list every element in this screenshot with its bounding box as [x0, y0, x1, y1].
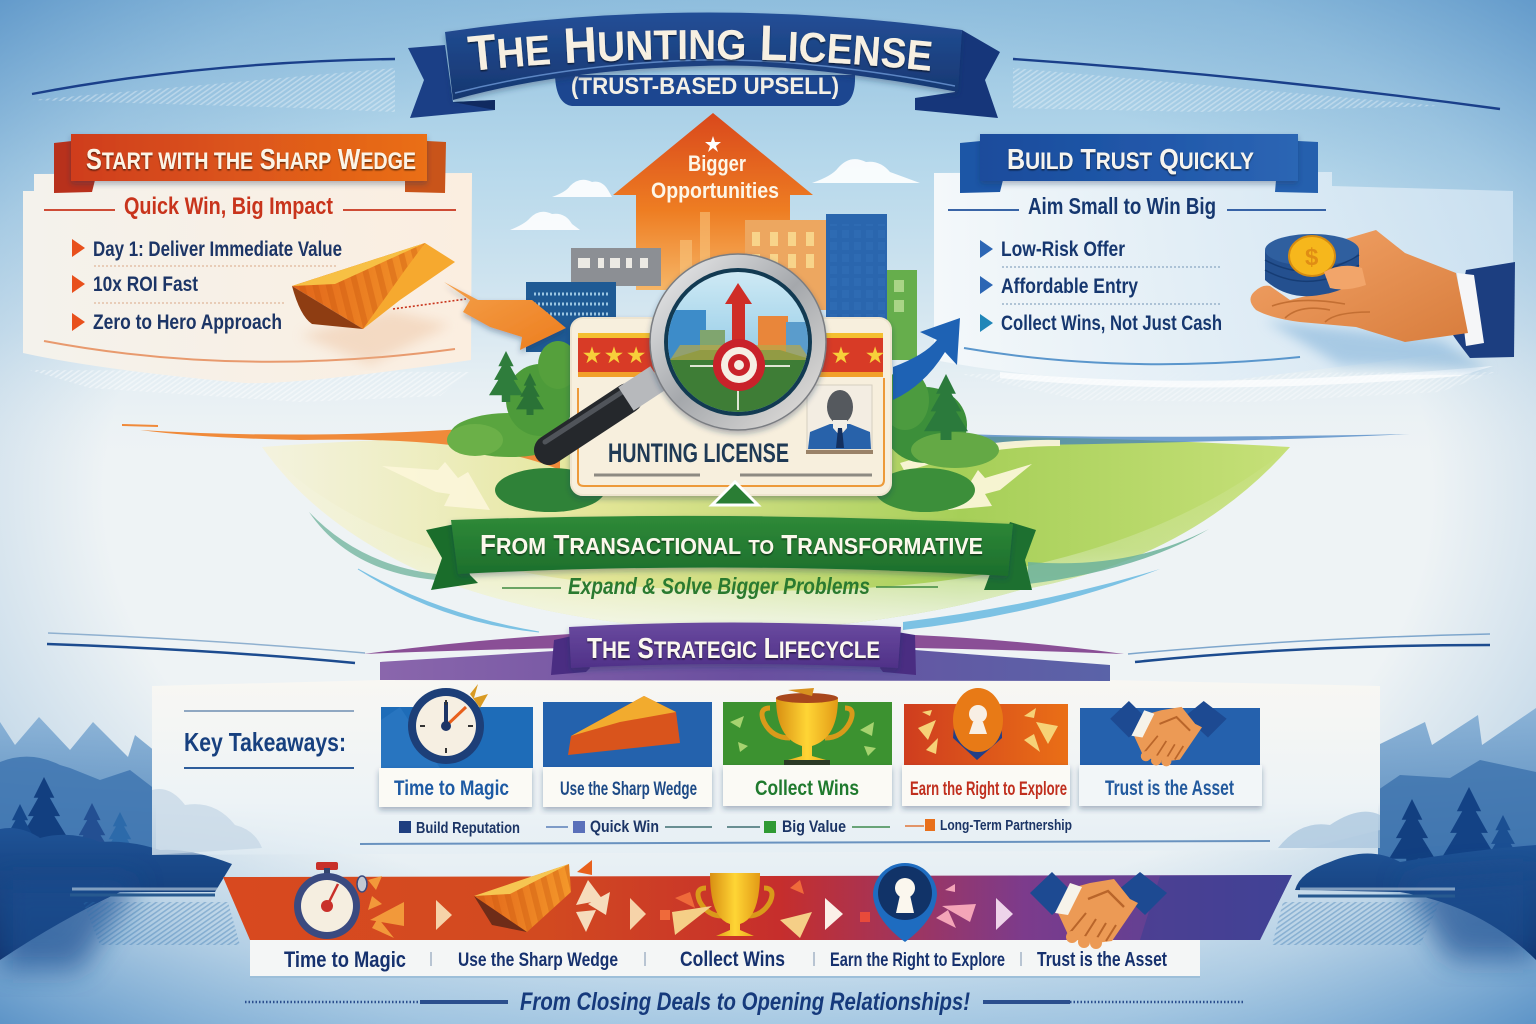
- coin stack: [1265, 250, 1359, 296]
- bullet list: Zero to Hero Approach: [93, 311, 282, 334]
- bullet list: Collect Wins, Not Just Cash: [1001, 312, 1222, 335]
- banner: the strategic lifecycle: [551, 622, 916, 675]
- bullet list: Low-Risk Offer: [1001, 238, 1125, 261]
- icon: hand holding coin: $: [1305, 244, 1319, 271]
- card: trust is the asset: [1079, 701, 1262, 806]
- subtitle plate: (TRUST-BASED UPSELL): [571, 73, 839, 100]
- lifecycle band: [223, 860, 1292, 977]
- tagline: From Closing Deals to Opening Relationships!: [520, 988, 970, 1016]
- icon: wedge: [292, 243, 466, 365]
- license card: ★★: [832, 345, 884, 367]
- banner: from transactional to transformative: [426, 516, 1036, 599]
- trees and hills: [447, 341, 999, 512]
- icon: keyhole pin: [860, 863, 976, 942]
- label strip: Use the Sharp Wedge: [458, 950, 618, 971]
- center: license illustration: [444, 113, 999, 512]
- license card: [571, 318, 891, 495]
- legend row: Big Value: [782, 817, 846, 836]
- buildings: [526, 214, 917, 360]
- label strip: [250, 940, 1200, 977]
- card: collect wins: Collect Wins: [755, 777, 859, 800]
- card: trust is the asset: Trust is the Asset: [1105, 777, 1234, 800]
- label strip: Trust is the Asset: [1037, 949, 1167, 971]
- card: earn the right to explore: [902, 688, 1070, 806]
- bullet list: 10x ROI Fast: [93, 273, 198, 296]
- icon: trophy: [660, 873, 812, 938]
- card: use the sharp wedge: Use the Sharp Wedge: [560, 779, 697, 800]
- icon: broken wedge: [474, 860, 610, 932]
- green field: [262, 436, 1290, 632]
- peak marker: [712, 482, 758, 505]
- card: time to magic: [379, 684, 533, 807]
- portrait: [807, 385, 872, 449]
- bullet list: [72, 238, 342, 334]
- title ribbon: [408, 12, 1000, 118]
- bullet list: Day 1: Deliver Immediate Value: [93, 238, 342, 261]
- arrow: bigger opportunities: Bigger: [688, 151, 746, 176]
- banner: BUILD TRUST QUICKLY: [1007, 144, 1254, 176]
- license title: HUNTING LICENSE: [608, 438, 789, 468]
- heading: Aim Small to Win Big: [1028, 193, 1216, 219]
- top decorative streaks: [32, 59, 1500, 112]
- banner: START WITH THE SHARP WEDGE: [86, 144, 416, 176]
- blue swoosh right: [930, 433, 1410, 446]
- panel: key takeaways: [152, 650, 1380, 855]
- card: collect wins: [723, 688, 892, 806]
- bullet list: Affordable Entry: [1001, 275, 1138, 298]
- legend row: Quick Win: [590, 817, 659, 836]
- subtitle: Expand & Solve Bigger Problems: [568, 573, 870, 599]
- card body: [934, 172, 1513, 402]
- forest left: [0, 717, 240, 970]
- label strip: Time to Magic: [284, 947, 406, 972]
- panel: build trust quickly: [934, 134, 1515, 402]
- icon: stopwatch: [294, 862, 404, 939]
- icon: handshake: [1030, 872, 1167, 949]
- card: earn the right to explore: Earn the Right to Explore: [910, 779, 1067, 800]
- heading: key takeaways: Key Takeaways:: [184, 727, 346, 757]
- icon: hand holding coin: [1250, 230, 1515, 370]
- sleeve: [1453, 262, 1515, 358]
- banner: the strategic lifecycle: THE STRATEGIC LIFECYCLE: [587, 633, 880, 665]
- swooshes around lifecycle heading: [47, 633, 1490, 663]
- forest right: [1272, 708, 1536, 960]
- label strip: Earn the Right to Explore: [830, 950, 1005, 971]
- card: time to magic: Time to Magic: [394, 777, 509, 800]
- white flow arrows: [382, 440, 1060, 510]
- card: use the sharp wedge: [543, 696, 712, 807]
- heading: Quick Win, Big Impact: [124, 193, 333, 220]
- arrow: bigger opportunities: [613, 113, 813, 290]
- license card: ★★★: [583, 345, 645, 367]
- banner: [960, 134, 1318, 193]
- bullet list: [980, 238, 1222, 335]
- clouds: [510, 159, 920, 230]
- legend row: Long-Term Partnership: [940, 817, 1072, 834]
- magnifier: [545, 254, 826, 450]
- card body: [23, 173, 472, 402]
- label strip: Collect Wins: [680, 948, 785, 971]
- arrow: bigger opportunities: Opportunities: [651, 178, 779, 203]
- banner: [54, 134, 446, 193]
- icon: trophy: [730, 688, 876, 765]
- banner: from transactional to transformative: FROM TRANSACTIONAL TO TRANSFORMATIVE: [480, 529, 983, 560]
- panel: start with the sharp wedge: [23, 134, 472, 402]
- title text: THE HUNTING LICENSE: [466, 26, 932, 73]
- arrow markers: [436, 898, 646, 930]
- orange swoosh left: [122, 424, 560, 470]
- legend row: [399, 817, 1072, 837]
- legend row: Build Reputation: [416, 820, 520, 837]
- arrow: orange: [444, 282, 566, 350]
- arrow: blue: [893, 318, 960, 400]
- band behind lifecycle heading: [380, 650, 1110, 681]
